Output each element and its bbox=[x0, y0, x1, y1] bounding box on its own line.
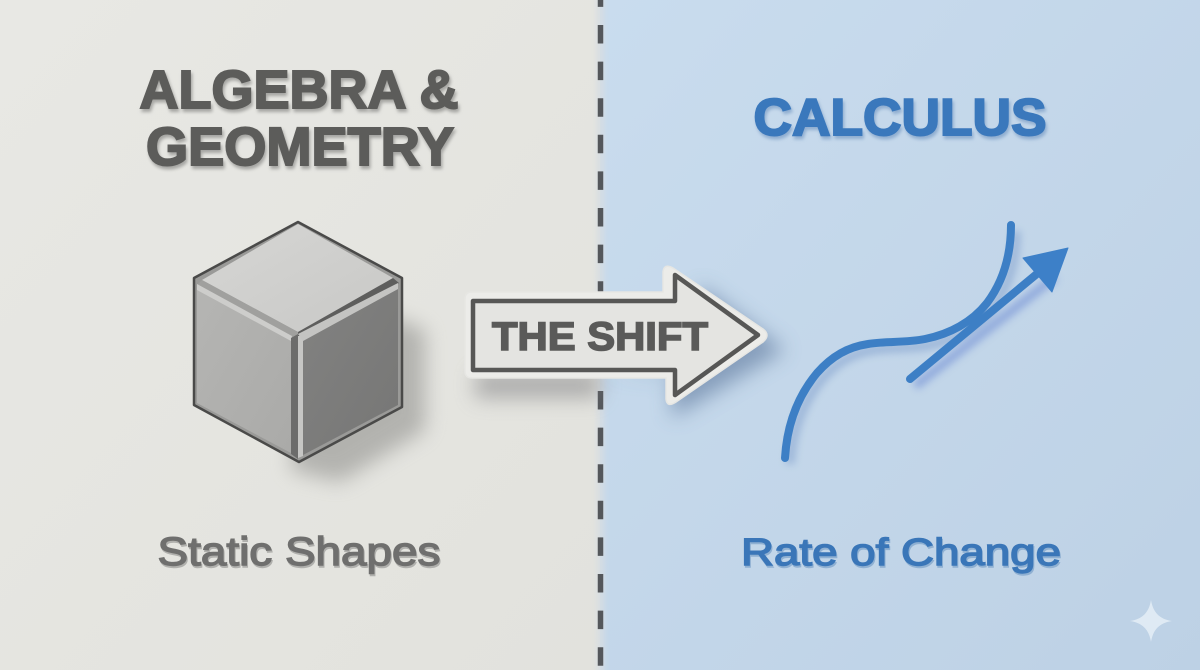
caption: Static Shapes: Static Shapes bbox=[158, 530, 440, 574]
caption: Rate of Change: Rate of Change bbox=[742, 534, 1062, 576]
arrowhead bbox=[1023, 248, 1068, 292]
curve bbox=[785, 225, 1011, 458]
arrow: the shift bbox=[465, 266, 785, 418]
arrow outline bbox=[473, 275, 758, 395]
heading: Algebra & Geometry: ALGEBRA & bbox=[140, 60, 458, 120]
heading: Calculus: CALCULUS bbox=[754, 89, 1046, 147]
arrow body bbox=[465, 266, 767, 404]
tangent shadow bbox=[915, 277, 1055, 386]
dashed divider bbox=[598, 0, 603, 670]
icon: rate of change curve with tangent arrow bbox=[785, 225, 1068, 464]
heading: Algebra & Geometry: GEOMETRY bbox=[146, 117, 454, 177]
icon: sparkle watermark bbox=[1130, 600, 1172, 642]
heading: Algebra & Geometry bbox=[140, 60, 460, 180]
caption: Rate of Change: Rate of Change bbox=[741, 532, 1061, 574]
caption: Static Shapes: Static Shapes bbox=[158, 532, 442, 576]
tangent line bbox=[910, 273, 1038, 379]
heading: Algebra & Geometry: ALGEBRA & bbox=[141, 63, 460, 123]
panel: algebra and geometry background bbox=[0, 0, 600, 670]
arrow label: THE SHIFT bbox=[492, 315, 708, 359]
heading: Algebra & Geometry: GEOMETRY bbox=[148, 120, 456, 180]
icon: cube bbox=[194, 222, 425, 482]
curve shadow bbox=[790, 231, 1016, 464]
panel: calculus background bbox=[600, 0, 1200, 670]
heading: Calculus: CALCULUS bbox=[755, 92, 1048, 150]
